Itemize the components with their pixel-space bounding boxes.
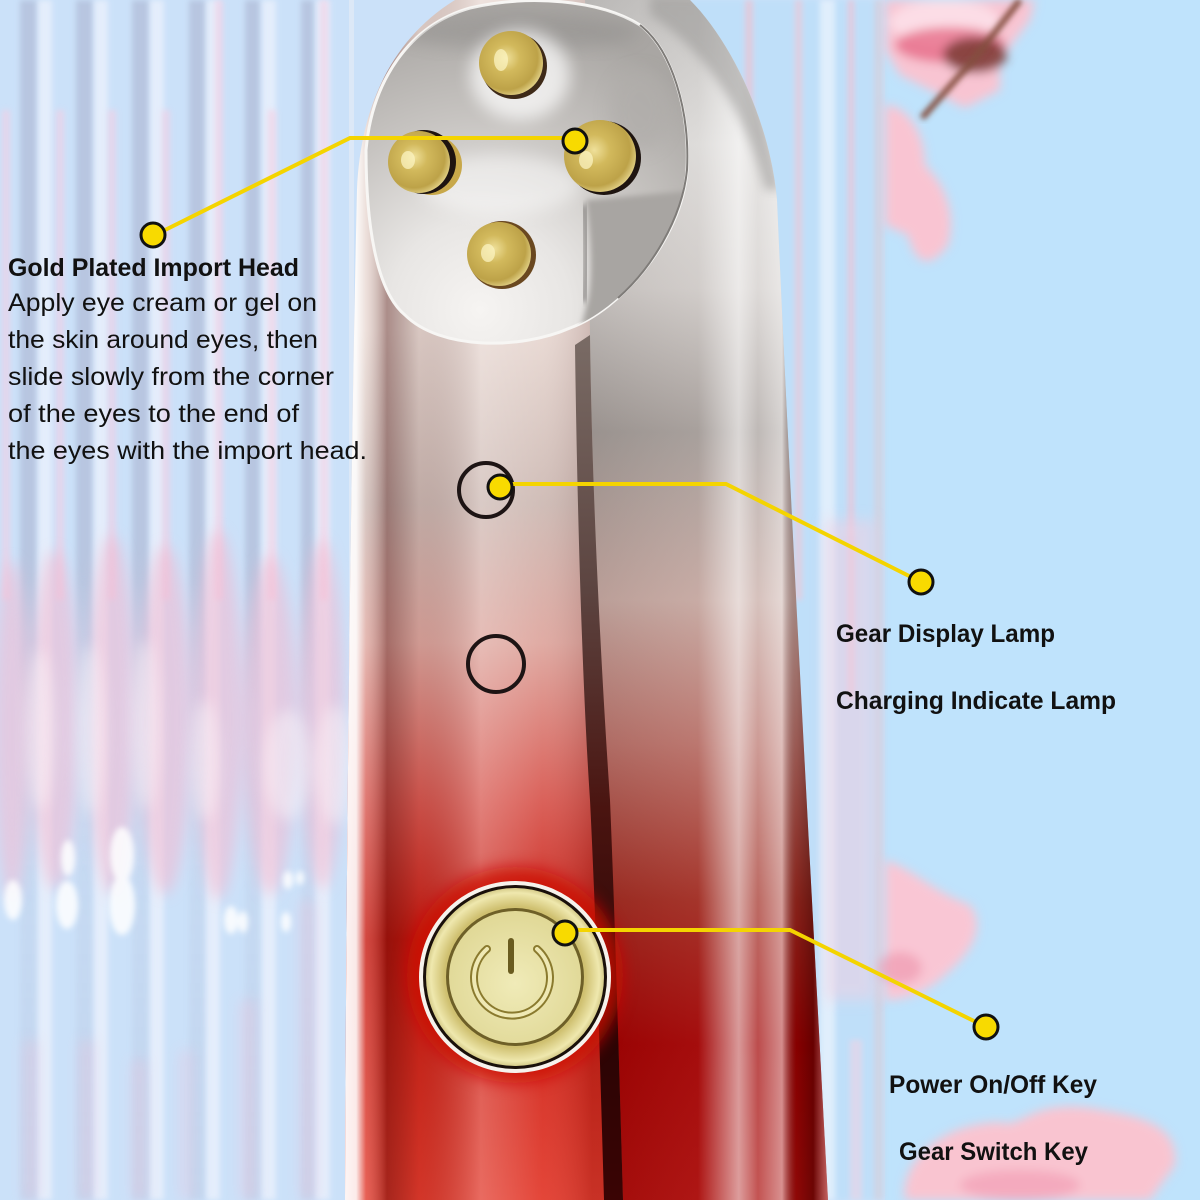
wand right section shading (585, 0, 835, 1200)
text block: gold plated import head (8, 254, 367, 465)
text block: gold plated import head: the eyes with the import head. (8, 437, 367, 465)
text block: gold plated import head: of the eyes to the end of (8, 400, 299, 428)
icon: gold import head nodes (388, 31, 641, 289)
text block: gold plated import head: the skin around eyes, then (8, 326, 318, 354)
wand left section (340, 0, 630, 1200)
callout line: gold plated import head (141, 129, 587, 247)
text block: gold plated import head: Gold Plated Import Head (8, 254, 299, 282)
dark centre slit (575, 335, 623, 1200)
bottom node (467, 221, 536, 289)
glass strip pink reflection (825, 520, 875, 1000)
label: gear switch key: Gear Switch Key (899, 1138, 1088, 1166)
label: charging indicate lamp: Charging Indicate Lamp (836, 687, 1116, 715)
label: gear display lamp: Gear Display Lamp (836, 620, 1055, 648)
top node (479, 31, 547, 99)
callout line: power key (553, 921, 998, 1039)
head plate (366, 1, 700, 343)
wand left section shading (345, 0, 604, 1200)
top shoulder shade (650, 0, 780, 190)
glass strip right of the product (690, 0, 885, 1200)
wand right section (585, 0, 835, 1200)
text block: gold plated import head: slide slowly from the corner (8, 363, 334, 391)
right node (564, 120, 641, 195)
label: power on/off key: Power On/Off Key (889, 1071, 1097, 1099)
text block: gold plated import head: Apply eye cream or gel on (8, 289, 317, 317)
background: blossom branch (922, 0, 1020, 118)
product: eye massager wand (340, 0, 835, 1200)
background: blossoms (878, 0, 1175, 1200)
callout line: gear display lamp (488, 475, 933, 594)
left node (388, 130, 462, 195)
icon: indicator lamp rings (459, 463, 524, 692)
icon: power button (407, 867, 623, 1083)
background: ribbed glass panel left (0, 0, 885, 1200)
